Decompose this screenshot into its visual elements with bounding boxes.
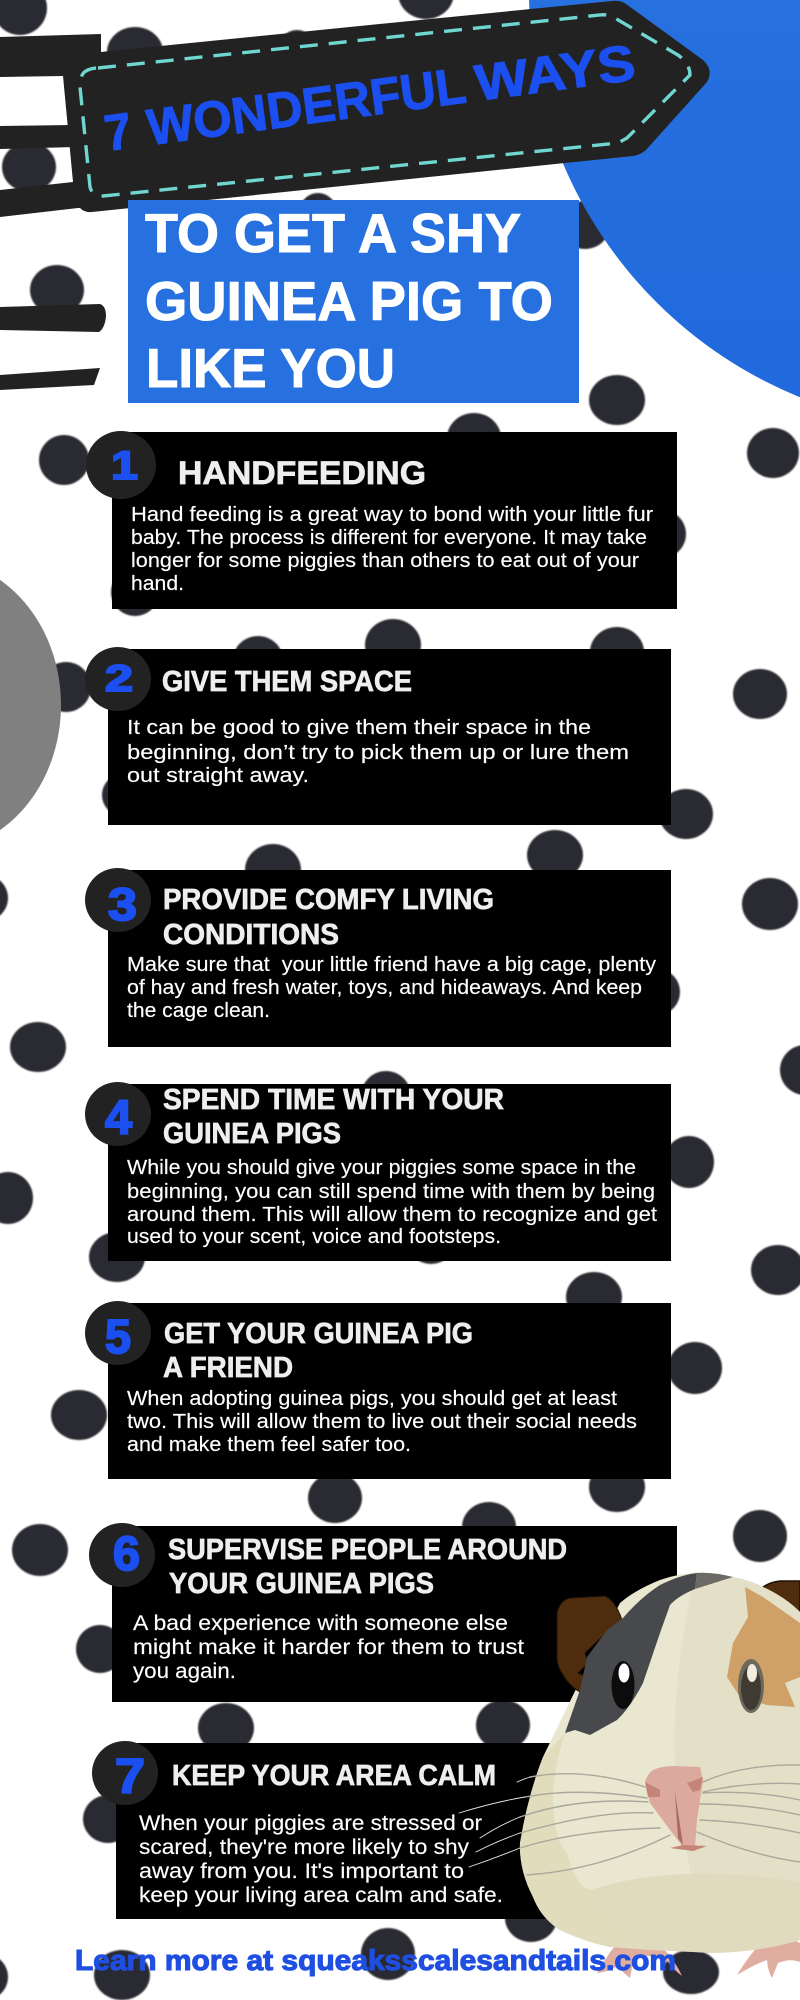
- body 5: and make them feel safer too.: [127, 1433, 411, 1456]
- pig rim shading: [520, 1733, 650, 1950]
- pig belly shading: [590, 1874, 800, 1953]
- heading 7: KEEP YOUR AREA CALM: [172, 1760, 496, 1792]
- heading 6: SUPERVISE PEOPLE AROUND: [168, 1534, 567, 1566]
- body 6: you again.: [133, 1659, 236, 1683]
- body 7: When your piggies are stressed or: [139, 1811, 482, 1835]
- badge 2: 2: [105, 658, 133, 699]
- body 1: baby. The process is different for everyone. It may take: [131, 526, 647, 549]
- heading 2: GIVE THEM SPACE: [162, 666, 412, 698]
- pig left eye: [612, 1661, 634, 1709]
- panel 1: handfeeding: [86, 431, 677, 609]
- left decorative bars: [0, 34, 106, 390]
- pig whiskers: [459, 1765, 800, 1875]
- pig right eye: [738, 1659, 764, 1713]
- body 1: longer for some piggies than others to eat out of your: [131, 549, 639, 572]
- body 5: two. This will allow them to live out their social needs: [127, 1410, 637, 1433]
- body 4: [127, 1156, 657, 1248]
- body 3: the cage clean.: [127, 999, 270, 1022]
- pig right ear: [758, 1581, 800, 1625]
- body 6: might make it harder for them to trust: [133, 1635, 524, 1659]
- body 5: When adopting guinea pigs, you should get at least: [127, 1387, 617, 1410]
- pig body: [520, 1572, 800, 1953]
- body 2: It can be good to give them their space in the: [127, 716, 591, 739]
- body 4: While you should give your piggies some space in the: [127, 1156, 636, 1179]
- subtitle text: LIKE YOU: [146, 337, 395, 399]
- pig right face shade: [675, 1577, 800, 1953]
- heading 1: HANDFEEDING: [178, 455, 426, 491]
- heading 4: [163, 1084, 504, 1150]
- body 1: Hand feeding is a great way to bond with your little fur: [131, 503, 653, 526]
- badge 1: [86, 431, 156, 499]
- guinea pig illustration: [459, 1572, 800, 1978]
- body 3: of hay and fresh water, toys, and hideaways. And keep: [127, 976, 642, 999]
- pig tan patch: [727, 1587, 800, 1707]
- body 7: keep your living area calm and safe.: [139, 1883, 503, 1907]
- badge 3: [85, 868, 151, 932]
- title banner: [63, 1, 710, 212]
- body 4: beginning, you can still spend time with them by being: [127, 1180, 655, 1203]
- body 6: [133, 1611, 524, 1683]
- badge 3: 3: [108, 879, 137, 930]
- pig grey patch highlight: [695, 1573, 733, 1589]
- badge 7: 7: [115, 1750, 145, 1804]
- badge 1: 1: [111, 444, 138, 488]
- body 2: out straight away.: [127, 764, 309, 787]
- panel 6: supervise people: [89, 1523, 677, 1702]
- pig left foot: [597, 1937, 682, 1978]
- banner stitching: [80, 15, 690, 196]
- heading 3: PROVIDE COMFY LIVING: [163, 884, 494, 916]
- panel 7: keep area calm: [92, 1741, 576, 1919]
- panel 2: give them space: [85, 647, 671, 825]
- body 4: used to your scent, voice and footsteps.: [127, 1225, 501, 1248]
- banner title text: WONDERFUL: [143, 57, 469, 156]
- badge 4: 4: [105, 1092, 132, 1145]
- grey circle left: [0, 559, 61, 851]
- pig nose: [645, 1766, 707, 1851]
- heading 3: [163, 884, 494, 951]
- heading 5: A FRIEND: [163, 1352, 293, 1384]
- body 6: A bad experience with someone else: [133, 1611, 508, 1635]
- body 1: [131, 503, 653, 595]
- heading 4: GUINEA PIGS: [163, 1118, 341, 1150]
- badge 6: [89, 1523, 155, 1587]
- body 1: hand.: [131, 572, 184, 595]
- banner title text: [101, 34, 639, 162]
- badge 5: [85, 1301, 151, 1365]
- heading 6: [168, 1534, 567, 1600]
- pig right foot: [737, 1937, 800, 1978]
- body 7: [139, 1811, 503, 1907]
- body 7: away from you. It's important to: [139, 1859, 464, 1883]
- body 5: [127, 1387, 637, 1456]
- heading 5: [163, 1318, 473, 1384]
- banner title text: WAYS: [471, 34, 639, 112]
- subtitle text: [145, 202, 553, 399]
- heading 3: CONDITIONS: [163, 919, 339, 951]
- badge 4: [85, 1082, 151, 1146]
- panel 4: spend time: [85, 1082, 671, 1261]
- badge 6: 6: [113, 1528, 140, 1581]
- pig left ear: [557, 1596, 622, 1692]
- subtitle text: GUINEA PIG TO: [145, 270, 553, 332]
- body 2: beginning, don’t try to pick them up or lure them: [127, 741, 629, 764]
- subtitle panel: [128, 200, 579, 403]
- heading 5: GET YOUR GUINEA PIG: [164, 1318, 473, 1350]
- badge 2: [85, 647, 151, 711]
- badge 7: [92, 1741, 158, 1805]
- blue circle top right: [529, 0, 800, 429]
- subtitle text: TO GET A SHY: [145, 202, 521, 264]
- body 3: [127, 953, 657, 1022]
- body 7: scared, they're more likely to shy: [139, 1835, 469, 1859]
- body 3: Make sure that your little friend have a big cage, plenty: [127, 953, 657, 976]
- panel 3: comfy living conditions: [85, 868, 671, 1047]
- body 2: [127, 716, 629, 787]
- heading 6: YOUR GUINEA PIGS: [169, 1568, 434, 1600]
- panel 5: get a friend: [85, 1301, 671, 1479]
- banner title text: 7: [101, 102, 135, 162]
- badge 5: 5: [105, 1311, 131, 1364]
- body 4: around them. This will allow them to recognize and get: [127, 1203, 657, 1226]
- heading 4: SPEND TIME WITH YOUR: [163, 1084, 504, 1116]
- footer link: Learn more at squeaksscalesandtails.com: [75, 1945, 676, 1977]
- pig grey patch: [565, 1573, 697, 1735]
